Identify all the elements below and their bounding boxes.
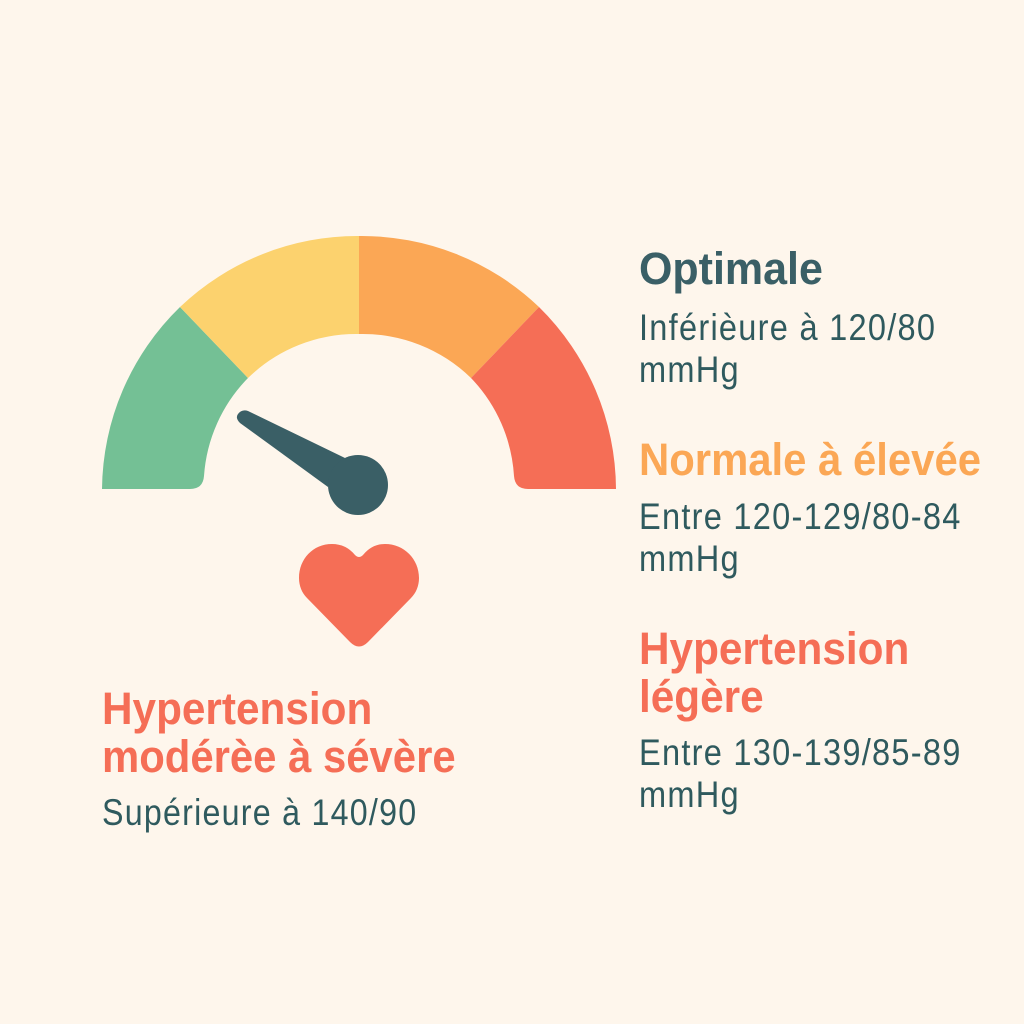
heading: Hypertension légère [639, 623, 909, 722]
heading: Hypertension légère: Hypertension [639, 623, 909, 674]
heading: Hypertension légère: légère [639, 671, 764, 722]
gauge segment: green [102, 307, 248, 489]
heading: Hypertension modérée à sévère [102, 683, 456, 782]
text: Optimale range: Inférièure à 120/80 [639, 307, 936, 348]
text: Hypertension légère range: mmHg [639, 774, 740, 815]
text: Normale range: Entre 120-129/80-84 [639, 496, 962, 537]
needle [237, 410, 388, 515]
text: Hypertension légère range: Entre 130-139/85-89 [639, 732, 962, 773]
heading: Normale à élevée: Normale à élevée [639, 434, 981, 485]
heading: Hypertension modérée à sévère: Hypertension [102, 683, 372, 734]
heading: Hypertension modérée à sévère: modérèe à sévère [102, 731, 456, 782]
text: Optimale range [639, 307, 936, 390]
text: Hypertension légère range [639, 732, 962, 815]
gauge segment: yellow [180, 236, 359, 378]
gauge segment: orange [359, 236, 539, 378]
text: Optimale range: mmHg [639, 349, 740, 390]
heading: Optimale: Optimale [639, 243, 823, 294]
text: Normale range: mmHg [639, 538, 740, 579]
text: Normale range [639, 496, 962, 579]
gauge segment: red [471, 307, 616, 489]
text: Hypertension modérée range: Supérieure à 140/90 [102, 792, 417, 833]
icon: heart [299, 544, 419, 646]
